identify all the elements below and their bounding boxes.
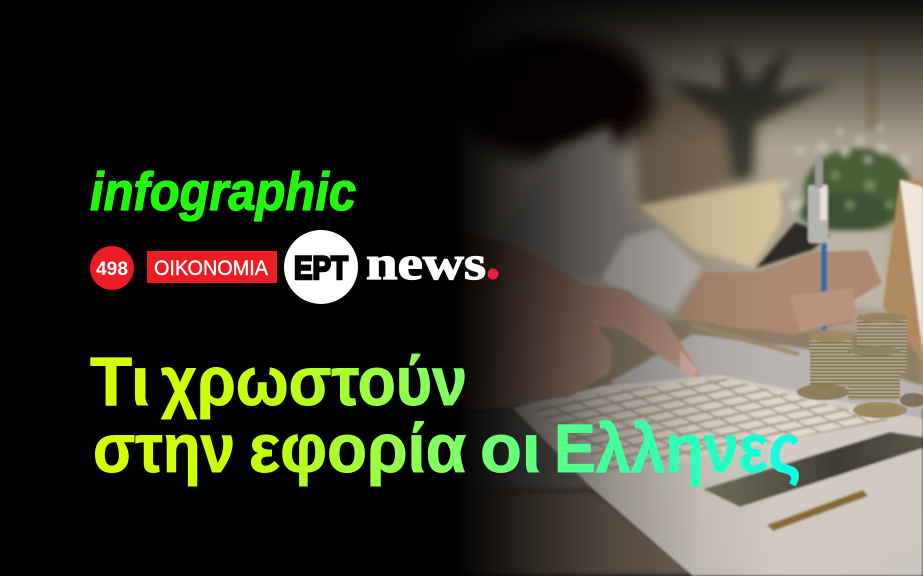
ERT logo: ΕΡΤ: [294, 250, 348, 286]
calendar tent: [883, 180, 923, 364]
main title: Ελληνες: [554, 410, 801, 487]
paper sheets: [610, 334, 923, 430]
writing hand: [677, 250, 882, 334]
leafy plant: [780, 124, 912, 232]
infographic label: infographic: [90, 162, 356, 222]
coin stacks: [797, 313, 923, 418]
armchair backdrop: [633, 87, 745, 215]
main title: χρωστούν: [161, 343, 467, 420]
pencil: [690, 322, 800, 356]
news wordmark: news: [366, 237, 486, 290]
background photo: hands on calculator with coins: [440, 0, 923, 576]
wall backdrop: [440, 0, 923, 410]
calculator screen: [703, 432, 923, 507]
issue number badge: [90, 246, 134, 290]
fingers over pen: [790, 288, 856, 332]
category tag: [147, 251, 277, 283]
dark chair shadow: [756, 222, 830, 268]
sheet under calculator: [450, 405, 600, 492]
sweater: [490, 125, 700, 316]
fingernail: [680, 350, 698, 378]
category tag: ΟΙΚΟΝΟΜΙΑ: [154, 257, 268, 280]
main title: Τι: [90, 343, 150, 420]
cushion: [637, 180, 782, 268]
pen: [808, 158, 828, 330]
palm plant: [660, 40, 835, 178]
hair: [445, 30, 655, 160]
ERT logo: [284, 230, 358, 304]
calculator keys: [535, 378, 890, 470]
wooden post: [866, 20, 878, 130]
issue number badge: 498: [96, 259, 128, 280]
calendar page: [900, 180, 923, 353]
sleeve: [600, 228, 702, 314]
lower desk: [440, 490, 700, 576]
main title: στην: [93, 410, 235, 487]
calculator body: [513, 375, 923, 576]
main title: [90, 343, 801, 487]
desk surface: [560, 318, 923, 440]
main title: εφορία: [249, 410, 466, 487]
solar strip: [767, 490, 868, 531]
pointing hand: [440, 224, 700, 404]
table behind hand: [820, 232, 890, 310]
main title: οι: [480, 410, 541, 487]
